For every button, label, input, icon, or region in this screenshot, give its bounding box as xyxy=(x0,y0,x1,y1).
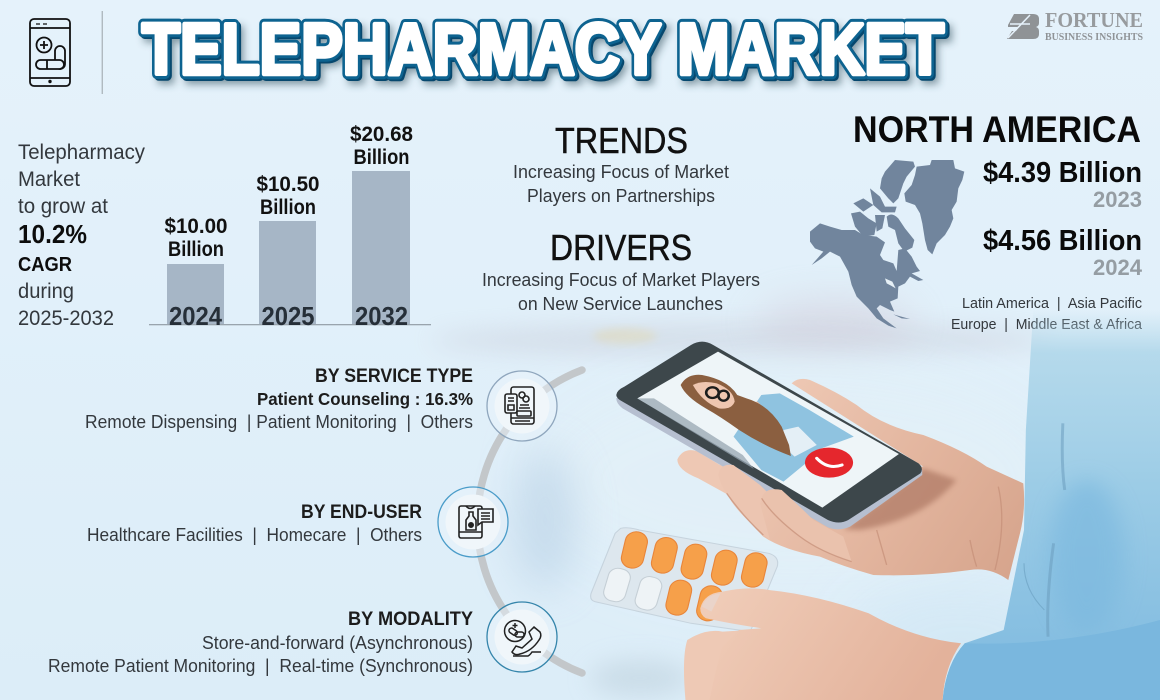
end-user segment: BY END-USER xyxy=(301,502,422,523)
trends block: Players on Partnerships xyxy=(527,186,715,206)
arc connector xyxy=(477,370,582,673)
hand holding phone: palm and thumb xyxy=(677,379,1024,580)
photo: hands with phone and pills xyxy=(591,310,1160,700)
shirt xyxy=(943,310,1160,700)
drivers block xyxy=(482,227,760,314)
CAGR text block: 10.2% xyxy=(18,219,87,249)
service type segment: BY SERVICE TYPE xyxy=(315,366,473,387)
blurred photo backdrop xyxy=(430,300,1070,696)
title: TELEPHARMACY MARKET xyxy=(144,12,946,92)
north america stats: $4.56 Billion xyxy=(983,225,1142,257)
thumb under blister xyxy=(684,630,802,700)
logo xyxy=(1007,8,1143,43)
north america stats: Europe | Middle East & Africa xyxy=(951,316,1143,333)
drivers block: Increasing Focus of Market Players xyxy=(482,270,760,290)
bar chart: Billion xyxy=(260,196,316,219)
bar chart: 2032 xyxy=(355,301,408,331)
north america stats: $4.39 Billion xyxy=(983,157,1142,189)
end-user segment xyxy=(87,502,422,545)
north america stats: 2023 xyxy=(1093,187,1142,212)
icon: phone with pills xyxy=(30,19,70,86)
modality segment: Store-and-forward (Asynchronous) xyxy=(202,633,473,653)
CAGR text block: 2025-2032 xyxy=(18,307,114,330)
title: TELEPHARMACY MARKET xyxy=(142,10,944,90)
bar chart: Billion xyxy=(168,238,224,261)
icon: end-user xyxy=(438,487,508,557)
title: TELEPHARMACY MARKET xyxy=(142,10,944,90)
fingers on phone xyxy=(718,465,852,562)
bar chart: 2025 xyxy=(262,301,314,331)
icon: service type xyxy=(487,371,557,441)
icon: modality xyxy=(487,602,557,672)
logo: FORTUNE xyxy=(1045,8,1143,32)
CAGR text block: Market xyxy=(18,168,80,191)
CAGR text block: CAGR xyxy=(18,254,73,276)
modality segment xyxy=(48,609,473,676)
service type segment: Remote Dispensing | Patient Monitoring | Others xyxy=(85,412,473,432)
CAGR text block xyxy=(18,141,145,330)
bar chart: $10.50 xyxy=(256,173,320,196)
end-user segment: Healthcare Facilities | Homecare | Others xyxy=(87,525,422,545)
logo: BUSINESS INSIGHTS xyxy=(1045,32,1143,43)
bar chart: Billion xyxy=(354,146,410,169)
drivers block: DRIVERS xyxy=(550,227,692,268)
hand holding pills xyxy=(700,588,961,700)
CAGR text block: to grow at xyxy=(18,195,108,218)
north america stats: 2024 xyxy=(1093,255,1143,280)
bar chart: $20.68 xyxy=(350,123,413,146)
title: TELEPHARMACY MARKET xyxy=(147,16,949,96)
modality segment: BY MODALITY xyxy=(348,609,473,630)
bar chart: $10.00 xyxy=(164,215,228,238)
phone xyxy=(616,342,922,529)
blister pack xyxy=(591,528,778,632)
service type segment xyxy=(85,366,473,432)
service type segment: Patient Counseling : 16.3% xyxy=(257,389,473,409)
trends block: TRENDS xyxy=(555,120,688,161)
north america stats: Latin America | Asia Pacific xyxy=(962,295,1142,312)
north america stats xyxy=(853,109,1143,333)
drivers block: on New Service Launches xyxy=(518,294,723,314)
bar chart: 2024 xyxy=(169,301,222,331)
bar chart xyxy=(149,123,431,331)
trends block: Increasing Focus of Market xyxy=(513,162,729,182)
modality segment: Remote Patient Monitoring | Real-time (Synchronous) xyxy=(48,656,473,676)
call button xyxy=(805,448,853,478)
video caller xyxy=(681,375,854,482)
map: North America xyxy=(810,160,964,328)
north america stats: NORTH AMERICA xyxy=(853,109,1141,150)
trends block xyxy=(513,120,729,206)
CAGR text block: Telepharmacy xyxy=(18,141,145,164)
CAGR text block: during xyxy=(18,280,74,303)
